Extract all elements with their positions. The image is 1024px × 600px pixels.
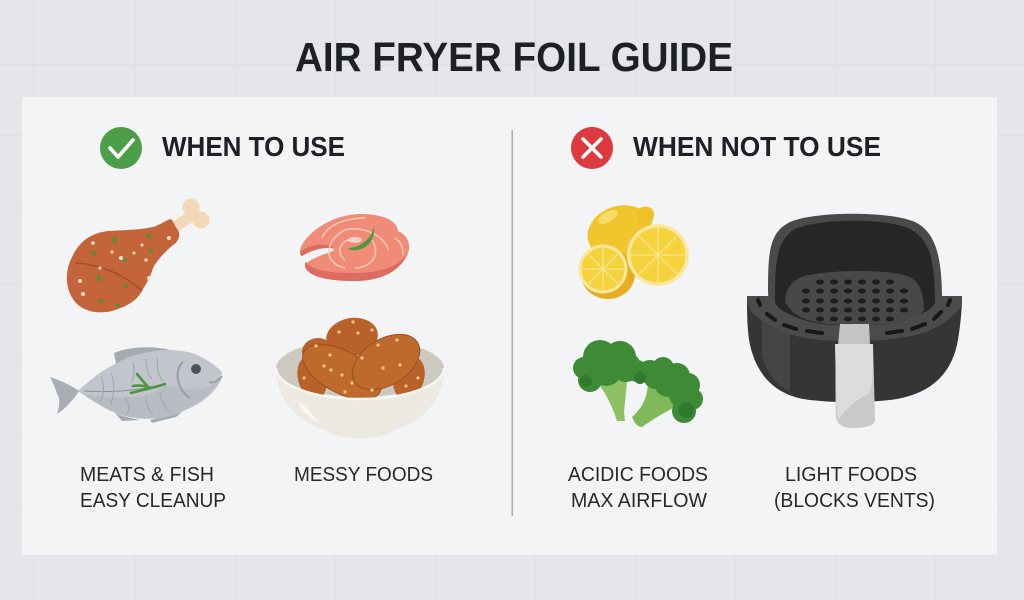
label: light foods: (BLOCKS VENTS) (774, 489, 935, 512)
icon: chicken drumstick (67, 198, 210, 312)
divider (512, 130, 513, 516)
heading: when to use: WHEN TO USE (162, 131, 345, 162)
heading: when not to use: WHEN NOT TO USE (633, 131, 881, 162)
title: AIR FRYER FOIL GUIDE (295, 34, 733, 80)
icon: broccoli (573, 340, 703, 427)
icon: salmon steak (300, 214, 409, 281)
label: light foods: LIGHT FOODS (785, 463, 917, 486)
label: meats and fish: EASY CLEANUP (80, 489, 226, 512)
label: acidic foods: MAX AIRFLOW (571, 489, 708, 512)
icon: green check (100, 127, 142, 169)
icon: grey fish (50, 347, 222, 423)
icon: lemons (578, 197, 689, 299)
label: meats and fish: MEATS & FISH (80, 463, 214, 486)
panel: main card (22, 97, 997, 555)
label: messy foods: MESSY FOODS (294, 463, 433, 486)
icon: air fryer basket with foil (747, 214, 962, 428)
label: acidic foods: ACIDIC FOODS (568, 463, 708, 486)
icon: red cross (571, 127, 613, 169)
icon: bowl of wings (276, 314, 444, 438)
basket front body (747, 296, 962, 402)
